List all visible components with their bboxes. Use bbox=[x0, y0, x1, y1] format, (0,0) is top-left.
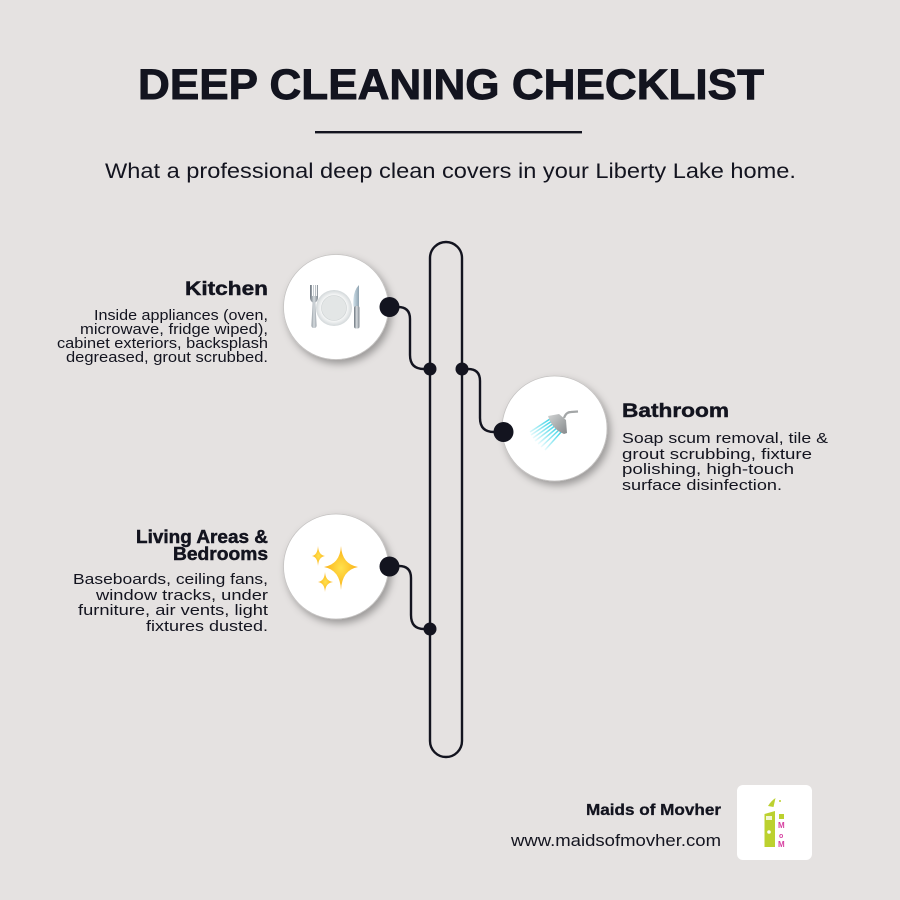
living areas description: fixtures dusted. bbox=[146, 618, 268, 635]
logo: o bbox=[779, 833, 783, 840]
kitchen icon circle bbox=[284, 254, 388, 360]
living areas icon circle bbox=[284, 514, 388, 619]
bathroom icon circle bbox=[502, 376, 607, 481]
bathroom description bbox=[622, 430, 828, 494]
icon: shower head bbox=[530, 412, 578, 450]
icon: sparkles bbox=[312, 546, 358, 592]
living areas description: furniture, air vents, light bbox=[78, 602, 269, 619]
brand name: Maids of Movher bbox=[586, 802, 721, 819]
bathroom description: grout scrubbing, fixture bbox=[622, 446, 812, 463]
connector: bathroom to timeline bbox=[456, 362, 514, 442]
logo: M bbox=[778, 840, 785, 849]
icon: plate and cutlery bbox=[310, 285, 360, 328]
living areas heading bbox=[136, 527, 268, 564]
bathroom description: polishing, high-touch bbox=[622, 461, 794, 478]
connector: kitchen to timeline bbox=[380, 297, 436, 376]
website: www.maidsofmovher.com bbox=[510, 832, 721, 850]
living areas description: window tracks, under bbox=[95, 587, 268, 604]
logo bbox=[737, 785, 812, 860]
kitchen heading: Kitchen bbox=[185, 279, 268, 300]
living areas description bbox=[73, 571, 269, 635]
title divider bbox=[315, 131, 582, 133]
connector: living areas to timeline bbox=[380, 556, 436, 636]
panel: kitchen bbox=[57, 254, 436, 376]
kitchen description: Inside appliances (oven, bbox=[94, 307, 268, 324]
living areas heading: Bedrooms bbox=[173, 544, 268, 564]
living areas heading: Living Areas & bbox=[136, 527, 268, 547]
central timeline tube bbox=[430, 242, 462, 757]
kitchen description: microwave, fridge wiped), bbox=[80, 321, 268, 338]
bathroom description: Soap scum removal, tile & bbox=[622, 430, 828, 447]
kitchen description bbox=[57, 307, 268, 366]
kitchen description: cabinet exteriors, backsplash bbox=[57, 335, 268, 352]
panel: bathroom bbox=[456, 362, 828, 494]
logo: M bbox=[778, 821, 785, 830]
living areas description: Baseboards, ceiling fans, bbox=[73, 571, 268, 588]
panel: living areas and bedrooms bbox=[73, 514, 436, 636]
bathroom heading: Bathroom bbox=[622, 401, 729, 422]
title: DEEP CLEANING CHECKLIST bbox=[138, 61, 764, 109]
kitchen description: degreased, grout scrubbed. bbox=[66, 349, 268, 366]
bathroom description: surface disinfection. bbox=[622, 477, 782, 494]
footer brand bbox=[510, 785, 812, 860]
subtitle: What a professional deep clean covers in your Liberty Lake home. bbox=[105, 160, 796, 183]
